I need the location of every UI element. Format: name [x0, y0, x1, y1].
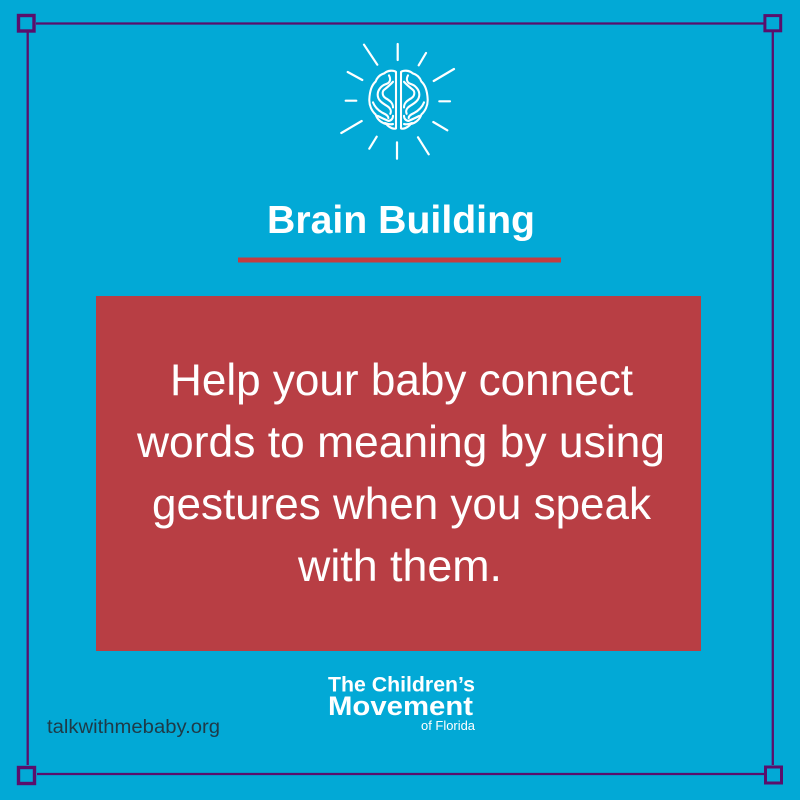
icon: light rays [341, 44, 454, 159]
heading underline [238, 258, 561, 262]
text block: message [136, 356, 665, 591]
icon: brain left hemisphere [369, 71, 396, 129]
text block: message: Help your baby connect [170, 356, 634, 405]
text block: message: gestures when you speak [152, 480, 652, 529]
panel: message [96, 296, 701, 651]
icon: brain with radiating lines [341, 44, 454, 159]
logo: The Children's Movement of Florida [328, 672, 475, 733]
logo: The Children's Movement of Florida: The Children’s [328, 672, 475, 696]
website url: talkwithmebaby.org [47, 717, 220, 738]
logo: The Children's Movement of Florida: Movement [328, 691, 473, 721]
icon: brain right hemisphere [401, 71, 428, 129]
text block: message: words to meaning by using [136, 418, 665, 467]
heading: Brain Building [267, 199, 535, 242]
logo: The Children's Movement of Florida: of Florida [421, 719, 475, 733]
text block: message: with them. [297, 542, 502, 591]
